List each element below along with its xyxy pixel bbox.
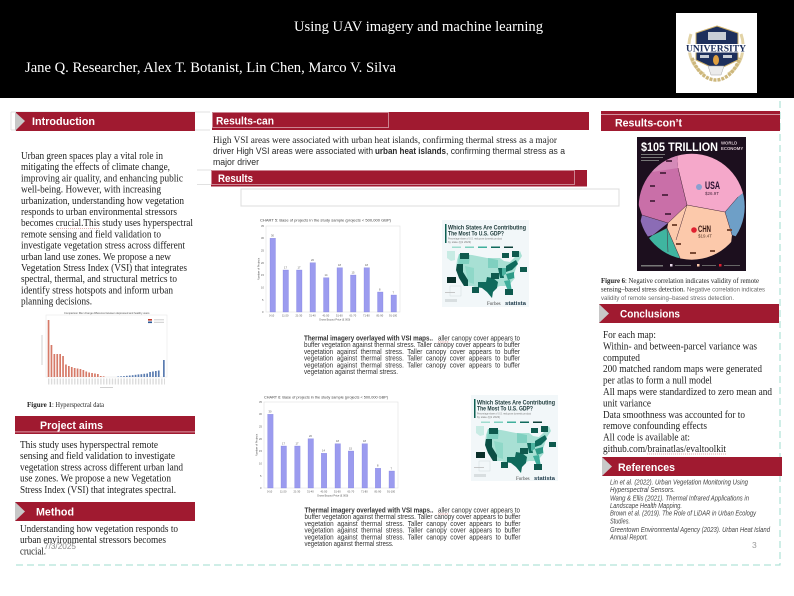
icon: university logo — [676, 13, 757, 93]
bar chart: chart 1: Number of Projects — [256, 257, 260, 280]
caption: thermal imagery 1: aller canopy cover appears to — [438, 334, 520, 342]
map card: which states 1: The Most To U.S. GDP? — [448, 231, 504, 238]
bar chart: chart 2: 91-100 — [387, 490, 396, 494]
conclusions text: For each map: — [603, 329, 656, 341]
bar chart: chart 1 — [256, 218, 400, 322]
icon: university logo: UNIVERSITY — [686, 44, 746, 54]
caption: thermal imagery 1: vegetation against thermal stress. Taller canopy cover appears to buffer — [304, 347, 521, 356]
introduction text: improving air quality, and enhancing public — [21, 173, 183, 184]
bar chart: chart 2: 30 — [268, 410, 272, 414]
conclusions text: github.com/brainatlas/evaltoolkit — [603, 443, 726, 455]
bar chart: chart 1: 20 — [261, 261, 264, 265]
project aims text: use zones. We propose a new Vegetation — [20, 474, 172, 485]
bar chart: chart 2: 20 — [259, 437, 262, 441]
caption: thermal imagery 2: aller canopy cover appears to — [438, 506, 520, 514]
bar chart: chart 1: 35 — [261, 224, 264, 228]
figure 6 caption: : Negative correlation indicates validity of remote — [625, 276, 759, 285]
bar chart: chart 1: 18 — [338, 263, 341, 267]
results-can text — [213, 135, 565, 167]
introduction text: investigate vegetation stress across different — [21, 241, 185, 252]
map card: which states 2: Which States Are Contributing — [477, 400, 555, 406]
heading: references — [602, 457, 782, 476]
heading: method — [15, 502, 195, 521]
poster: world economy voronoi: CHN — [698, 224, 711, 234]
heading: results-con't: Results-con’t — [615, 118, 682, 130]
poster: world economy voronoi: ECONOMY — [721, 146, 743, 151]
conclusions text: Data smoothness was accounted for to — [603, 409, 745, 421]
project aims text: vegetation stress across different urban land — [20, 462, 184, 473]
caption: thermal imagery 2: buffer vegetation against thermal stress. Taller canopy cover appears to buffer — [304, 512, 521, 521]
bar chart: chart 1: 0-10 — [269, 314, 275, 318]
bar chart: chart 1: 41-50 — [322, 314, 330, 318]
map card: which states 1: statista — [505, 301, 527, 307]
bar chart: chart 2: 31-40 — [307, 490, 314, 494]
heading: introduction — [15, 112, 195, 131]
method text: crucial. — [20, 546, 46, 557]
bar chart: chart 2: 0-10 — [267, 490, 273, 494]
date stamp: 7/3/2025 — [44, 541, 76, 551]
bar chart: chart 1: 71-80 — [363, 314, 370, 318]
bar chart: chart 2: 15 — [349, 446, 352, 450]
conclusions text: unit variance — [603, 397, 651, 409]
bar chart: chart 1: 7 — [392, 290, 394, 294]
method text: Understanding how vegetation responds to — [20, 524, 178, 535]
project aims text: This study uses hyperspectral remote — [20, 440, 158, 451]
references list: Studies. — [610, 518, 630, 525]
map card: which states 2: The Most To U.S. GDP? — [477, 406, 533, 413]
results-can text: High VSI areas were associated with urban heat islands, confirming thermal stress as a major — [213, 135, 558, 146]
bar chart: chart 2: 18 — [363, 439, 366, 443]
results-can text: driver High VSI areas were associated with — [213, 146, 373, 156]
map card: which states 2: statista — [534, 476, 556, 482]
bar chart: chart 1: 11-20 — [282, 314, 289, 318]
bar chart: chart 1: 20 — [311, 258, 314, 262]
bar chart: chart 2: 11-20 — [280, 490, 287, 494]
introduction text: mitigating the effects of climate change, — [21, 162, 170, 173]
bar chart: chart 2: 15 — [259, 449, 262, 453]
figure 6 caption: sensing–based stress detection. — [601, 284, 685, 294]
references list: Brown et al. (2019). The Role of LiDAR in Urban Ecology — [610, 511, 756, 518]
project aims text: Stress Index (VSI) that integrates spectral. — [20, 485, 176, 496]
introduction text: responds to urban environmental stressors — [21, 207, 177, 218]
heading: conclusions — [599, 304, 779, 323]
bar chart: chart 1: 17 — [298, 266, 301, 270]
decorative frame — [16, 98, 780, 565]
bar chart: chart 2: 18 — [336, 439, 339, 443]
poster: world economy voronoi: $19.4T — [698, 234, 712, 238]
heading: method: Method — [36, 506, 74, 518]
method text — [20, 524, 178, 557]
bar chart: chart 1: 61-70 — [350, 314, 357, 318]
bar chart: chart 1: 18 — [365, 263, 368, 267]
bar chart: chart 2: 21-30 — [294, 490, 301, 494]
empty text box — [241, 189, 619, 206]
bar chart: chart 2: 25 — [259, 424, 262, 428]
introduction text: urban land use zones. We propose a new — [21, 252, 171, 263]
title: Using UAV imagery and machine learning — [294, 19, 543, 35]
bar chart: chart 1: 17 — [284, 266, 287, 270]
results-can text: , confirming thermal stress as a — [446, 146, 565, 156]
results-can text: major driver — [213, 157, 259, 167]
map card: which states 1: Percentage share of U.S. real gross domestic product — [448, 236, 502, 240]
chart: hyperspectral bar chart: Comparison filter change difference between depressed and healthy users — [64, 311, 150, 315]
panel: references — [602, 457, 782, 541]
map card: which states 2: Percentage share of U.S. real gross domestic product — [477, 412, 531, 416]
map card: which states 1: Which States Are Contributing — [448, 224, 526, 232]
bar chart: chart 2: 8 — [377, 464, 379, 468]
bar chart: chart 2: 7 — [390, 466, 392, 470]
introduction text: well-being. However, with increasing — [21, 185, 161, 196]
caption: thermal imagery 1: vegetation against thermal stress. — [304, 367, 398, 376]
bar chart: chart 1: 10 — [261, 286, 264, 290]
panel: project aims — [15, 416, 195, 496]
poster: world economy voronoi: WORLD — [721, 140, 737, 146]
heading: results-con't — [601, 111, 780, 131]
panel: results heading: Results — [218, 173, 253, 185]
bar chart: chart 2 — [254, 396, 398, 498]
caption: thermal imagery 2: vegetation against thermal stress. — [304, 539, 394, 548]
chart: hyperspectral bar chart — [42, 311, 167, 388]
heading: conclusions: Conclusions — [620, 308, 680, 320]
results-can text: urban heat islands — [375, 146, 446, 156]
caption: thermal imagery 1: vegetation against thermal stress. Taller canopy cover appears to buffer — [304, 360, 521, 369]
bar chart: chart 2: 17 — [296, 442, 299, 446]
introduction text: Vegetation Stress Index (VSI) that integrates — [21, 263, 187, 274]
bar chart: chart 1: 30 — [271, 234, 274, 238]
figure 1 caption: : Hyperspectral data — [52, 400, 104, 409]
bar chart: chart 1: Gross Buyout Price (£ 000) — [319, 318, 350, 322]
bar chart: chart 1: 21-30 — [296, 314, 303, 318]
references list: Greentown Environmental Agency (2023). Urban Heat Island — [610, 527, 771, 534]
introduction text: identify stress hotspots and inform urban — [21, 285, 174, 296]
caption: thermal imagery 2: vegetation against thermal stress. Taller canopy cover appears to buffer — [304, 532, 521, 541]
map card: which states 1: Forbes — [487, 302, 501, 307]
bar chart: chart 1: 31-40 — [309, 314, 316, 318]
page number: 3 — [752, 540, 757, 550]
panel: results-can — [212, 112, 589, 167]
figure 6 caption: Negative correlation indicates — [687, 286, 766, 294]
references list — [609, 480, 771, 541]
bar chart: chart 2: 30 — [259, 412, 262, 416]
map card: which states 1 — [442, 220, 529, 307]
poster: world economy voronoi — [637, 137, 746, 271]
bar chart: chart 1: 5 — [262, 298, 264, 302]
panel: results heading — [197, 170, 587, 186]
introduction text: becomes crucial.This study uses hyperspectral — [21, 218, 193, 229]
bar chart: chart 1: 15 — [352, 270, 355, 274]
caption: thermal imagery 2: Thermal imagery overlayed with VSI maps.. — [304, 506, 434, 514]
introduction text: Urban green spaces play a vital role in — [21, 151, 164, 162]
bar chart: chart 1: 8 — [379, 288, 381, 292]
project aims text: sensing and field validation to investigate — [20, 451, 175, 462]
conclusions text: per atlas to form a null model — [603, 375, 712, 387]
heading: references: References — [618, 462, 675, 474]
bar chart: chart 2: 10 — [259, 462, 262, 466]
caption: thermal imagery 2: vegetation against thermal stress. Taller canopy cover appears to buffer — [304, 519, 521, 528]
conclusions text: All code is available at: — [603, 432, 690, 444]
bar chart: chart 2: 81-90 — [374, 490, 382, 494]
bar chart: chart 2: Gross Buyout Price (£ 000) — [317, 494, 348, 498]
references list: Hyperspectral Sensors. — [610, 487, 675, 494]
bar chart: chart 2: 0 — [260, 486, 262, 490]
figure 1 caption — [27, 400, 104, 409]
caption: thermal imagery 2 — [304, 506, 521, 548]
caption: thermal imagery 2: vegetation against thermal stress. Taller canopy cover appears to buffer — [304, 526, 521, 535]
bar chart: chart 2: 17 — [282, 442, 285, 446]
conclusions text — [603, 329, 772, 455]
poster: world economy voronoi: USA — [705, 180, 720, 192]
map card: which states 2 — [471, 395, 558, 482]
heading: results-can — [212, 112, 589, 130]
panel: introduction — [11, 112, 210, 308]
bar chart: chart 1: 30 — [261, 236, 264, 240]
bar chart: chart 1: 0 — [262, 310, 264, 314]
map card: which states 2: by state (Q1 2023) — [477, 415, 500, 419]
heading: results-can: Results-can — [216, 116, 274, 128]
project aims text — [20, 440, 184, 496]
figure 6 caption — [601, 276, 766, 302]
method text: urban environmental stressors becomes — [20, 535, 166, 546]
panel: conclusions — [599, 304, 779, 455]
bar chart: chart 2: 14 — [322, 448, 325, 452]
conclusions text: remove confounding effects — [603, 420, 707, 432]
authors: Jane Q. Researcher, Alex T. Botanist, Lin Chen, Marco V. Silva — [25, 60, 396, 76]
caption: thermal imagery 1: Thermal imagery overlayed with VSI maps.. — [304, 334, 433, 342]
bar chart: chart 2: 20 — [309, 434, 312, 438]
references list: Annual Report. — [609, 534, 648, 541]
bar chart: chart 1: 14 — [324, 273, 328, 277]
figure 6 caption: validity of remote sensing–based stress detection. — [601, 295, 734, 302]
bar chart: chart 2: 5 — [260, 474, 262, 478]
references list: Wang & Ellis (2021). Thermal Infrared Applications in — [610, 496, 749, 502]
bar chart: chart 1: 81-90 — [376, 314, 384, 318]
bar chart: chart 2: 51-60 — [334, 490, 341, 494]
bar chart: chart 2: 35 — [259, 400, 262, 404]
heading: introduction: Introduction — [32, 116, 95, 128]
poster: world economy voronoi: $26.9T — [705, 191, 719, 196]
introduction text: urbanization, understanding how vegetation — [21, 196, 185, 207]
introduction text: remote sensing and field validation to — [21, 229, 161, 240]
conclusions text: Within- and between-parcel variance was — [603, 340, 757, 352]
bar chart: chart 1: 15 — [261, 273, 264, 277]
bar chart: chart 1: 91-100 — [389, 314, 398, 318]
bar chart: chart 2: 61-70 — [348, 490, 355, 494]
map card: which states 1: by state (Q1 2023) — [448, 240, 471, 244]
poster: world economy voronoi: $105 TRILLION — [641, 140, 718, 154]
panel: method — [15, 502, 195, 557]
caption: thermal imagery 1: buffer vegetation against thermal stress. Taller canopy cover appears to buffer — [304, 340, 521, 349]
bar chart: chart 2: CHART 6: Base of projects in the study sample (projects < 500,000 GBP) — [264, 396, 388, 400]
figure 1 caption: Figure 1 — [27, 400, 52, 409]
bar chart: chart 1: 25 — [261, 248, 264, 252]
introduction text — [21, 151, 193, 308]
references list: Lin et al. (2022). Urban Vegetation Monitoring Using — [610, 480, 748, 486]
bar chart: chart 1: CHART 5: Base of projects in the study sample (projects < 500,000 GBP) — [260, 218, 391, 222]
introduction text: planning decisions. — [21, 297, 92, 308]
heading: project aims — [15, 416, 195, 434]
introduction text: spectral, thermal, and structural metrics to — [21, 274, 177, 285]
header band — [0, 0, 794, 98]
bar chart: chart 2: Number of Projects — [254, 433, 258, 456]
map card: which states 2: Forbes — [516, 477, 530, 482]
bar chart: chart 2: 41-50 — [320, 490, 328, 494]
caption: thermal imagery 1 — [304, 334, 521, 376]
bar chart: chart 1: 51-60 — [336, 314, 343, 318]
bar chart: chart 2: 71-80 — [361, 490, 368, 494]
heading: project aims: Project aims — [40, 420, 103, 432]
conclusions text: computed — [603, 352, 640, 364]
conclusions text: 200 matched random maps were generated — [603, 363, 762, 375]
caption: thermal imagery 1: vegetation against thermal stress. Taller canopy cover appears to buffer — [304, 354, 521, 363]
references list: Landscape Health Mapping. — [610, 503, 682, 510]
figure 6 caption: Figure 6 — [601, 276, 625, 285]
